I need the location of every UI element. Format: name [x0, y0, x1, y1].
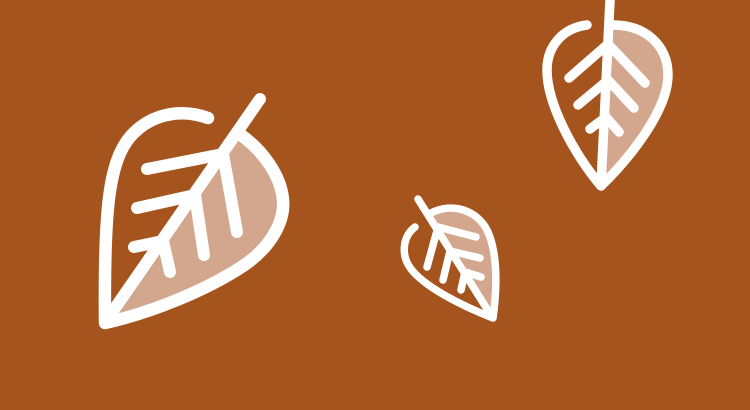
- large leaf outline: [105, 113, 283, 323]
- icon: top-right leaf: [547, 0, 668, 186]
- small leaf shaded half: [431, 208, 496, 318]
- icon: large leaf: [105, 99, 283, 323]
- large leaf shaded half: [106, 136, 283, 322]
- icon: small leaf: [404, 199, 496, 318]
- large leaf midrib and veins: [106, 99, 260, 321]
- top-right leaf shaded half: [601, 25, 668, 186]
- small leaf midrib and veins: [418, 199, 492, 317]
- small leaf outline: [404, 208, 496, 318]
- top-right leaf outline: [547, 25, 668, 186]
- top-right leaf midrib and veins: [569, 0, 645, 185]
